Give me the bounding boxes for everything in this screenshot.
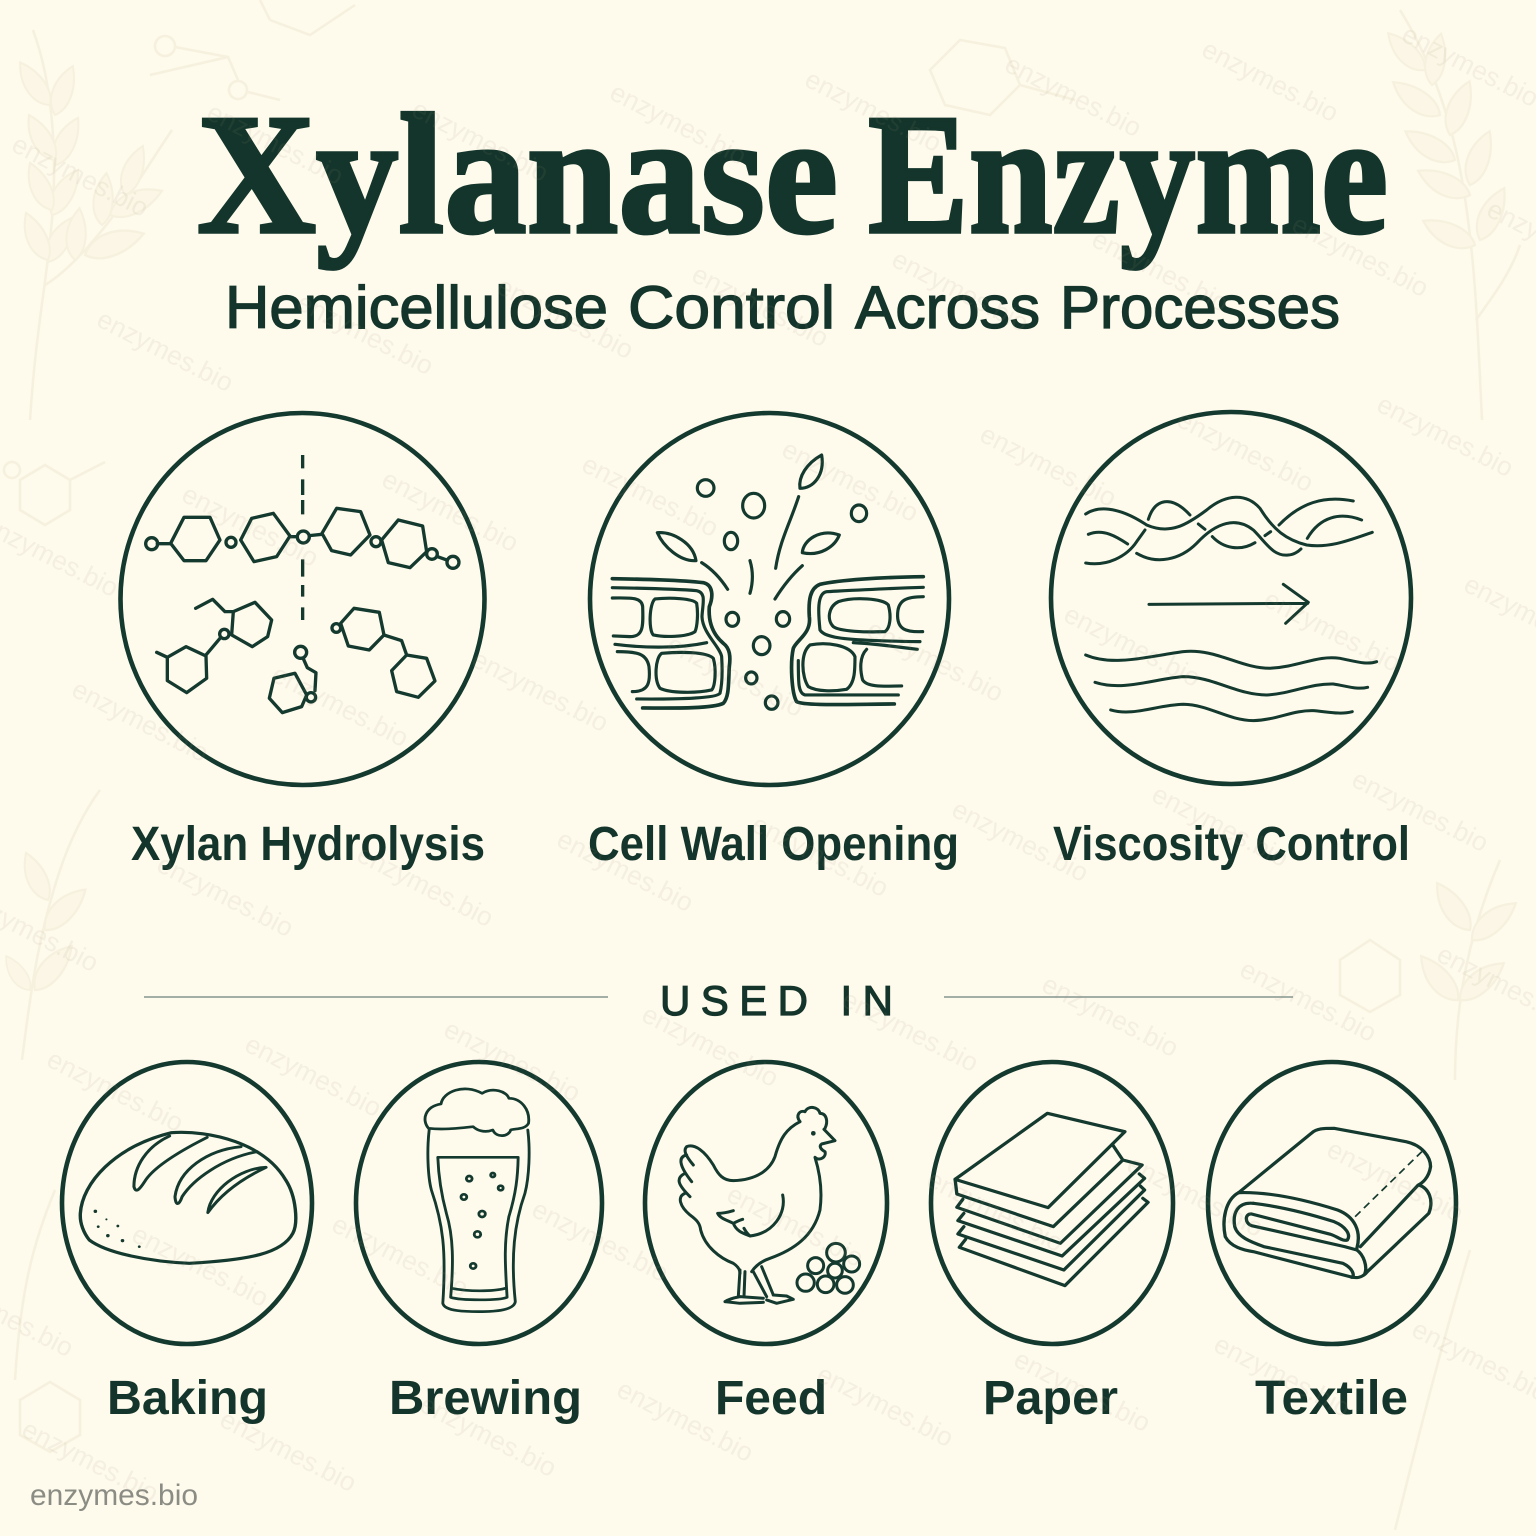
ring [645,1062,887,1344]
infographic canvas: enzymes.bio [1197,34,1343,128]
panel: baking [62,1062,312,1344]
infographic canvas: enzymes.bio [812,1359,958,1453]
panel: cell wall opening [590,413,949,785]
footer brand: enzymes.bio [30,1479,198,1512]
section heading: used in: USED IN [660,977,893,1024]
infographic canvas: enzymes.bio [777,434,923,528]
infographic canvas: enzymes.bio [687,259,833,353]
infographic canvas: enzymes.bio [862,614,1008,708]
infographic canvas: enzymes.bio [1009,1344,1155,1438]
label: viscosity control: Viscosity Control [1053,818,1410,871]
infographic canvas: enzymes.bio [240,1029,386,1123]
infographic canvas: enzymes.bio [1347,764,1493,858]
subtitle: Control [628,274,835,341]
label: cell wall opening: Cell Wall Opening [588,818,959,871]
infographic canvas: enzymes.bio [267,659,413,753]
infographic canvas: enzymes.bio [377,464,523,558]
infographic canvas: enzymes.bio [7,129,153,223]
ring [590,413,949,785]
ring [1051,412,1411,784]
infographic canvas: enzymes.bio [42,1044,188,1138]
infographic canvas: enzymes.bio [837,984,983,1078]
infographic canvas: enzymes.bio [352,839,498,933]
label: feed: Feed [715,1372,827,1425]
icon: folded textile [1224,1128,1431,1278]
infographic canvas: enzymes.bio [415,1389,561,1483]
panel: viscosity control [1051,412,1411,784]
ring [356,1062,602,1344]
icon: beer glass [425,1089,529,1312]
infographic canvas: enzymes.bio [975,419,1121,513]
label: baking: Baking [107,1372,268,1425]
infographic canvas: enzymes.bio [1172,404,1318,498]
infographic canvas: enzymes.bio [922,1164,1068,1258]
infographic canvas: enzymes.bio [552,824,698,918]
infographic canvas: enzymes.bio [1059,599,1205,693]
icon: bread loaf [80,1132,296,1263]
infographic canvas: enzymes.bio [439,1014,585,1108]
ring [931,1062,1173,1344]
infographic canvas: enzymes.bio [407,94,553,188]
infographic canvas: enzymes.bio [152,849,298,943]
infographic canvas: enzymes.bio [1037,969,1183,1063]
subtitle: Hemicellulose [225,274,608,341]
infographic canvas: enzymes.bio [177,479,323,573]
infographic canvas: enzymes.bio [1372,389,1518,483]
icon: xylan chain being cleaved [146,455,459,713]
infographic canvas: enzymes.bio [800,64,946,158]
infographic canvas: enzymes.bio [1259,584,1405,678]
infographic canvas: enzymes.bio [215,1404,361,1498]
infographic canvas: enzymes.bio [1322,1134,1468,1228]
infographic canvas: enzymes.bio [1209,1329,1355,1423]
panel: feed [645,1062,887,1344]
infographic canvas: enzymes.bio [67,674,213,768]
panel: textile [1208,1062,1456,1344]
title [197,80,1388,270]
infographic canvas: enzymes.bio [722,1179,868,1273]
icon: stack of paper [955,1113,1148,1286]
infographic canvas: enzymes.bio [1087,224,1233,318]
ring [120,413,484,785]
infographic canvas: enzymes.bio [92,304,238,398]
infographic canvas: enzymes.bio [1287,209,1433,303]
infographic canvas: enzymes.bio [605,77,751,171]
icon: ruptured cell wall [612,455,923,709]
panel: brewing [356,1062,602,1344]
title: Enzyme [868,80,1388,270]
label: xylan hydrolysis: Xylan Hydrolysis [131,818,485,871]
infographic canvas: enzymes.bio [947,794,1093,888]
subtitle: Processes [1060,274,1340,341]
infographic canvas: enzymes.bio [887,244,1033,338]
label: brewing: Brewing [389,1372,582,1425]
infographic canvas: enzymes.bio [202,97,348,191]
infographic canvas: enzymes.bio [612,1374,758,1468]
ring [62,1062,312,1344]
infographic canvas: enzymes.bio [1000,49,1146,143]
infographic canvas: enzymes.bio [577,449,723,543]
panel: xylan hydrolysis [120,413,484,785]
infographic canvas: enzymes.bio [17,1414,163,1508]
infographic canvas: enzymes.bio [637,999,783,1093]
infographic canvas: enzymes.bio [127,1219,273,1313]
infographic canvas: enzymes.bio [292,287,438,381]
infographic canvas: enzymes.bio [1147,779,1293,873]
infographic canvas: enzymes.bio [662,629,808,723]
panel: paper [931,1062,1173,1344]
infographic canvas: enzymes.bio [527,1194,673,1288]
infographic canvas: enzymes.bio [747,809,893,903]
title: Xylanase [197,80,838,270]
icon: hen with feed pellets [679,1107,860,1303]
infographic canvas: enzymes.bio [1235,954,1381,1048]
ring [1208,1062,1456,1344]
label: paper: Paper [983,1372,1118,1425]
subtitle: Across [855,274,1040,341]
infographic canvas: enzymes.bio [327,1209,473,1303]
infographic canvas: enzymes.bio [467,644,613,738]
label: textile: Textile [1255,1372,1408,1425]
icon: viscosity waves and arrow [1086,497,1377,721]
infographic canvas: enzymes.bio [1122,1149,1268,1243]
subtitle [225,274,1340,341]
infographic canvas: enzymes.bio [492,271,638,365]
